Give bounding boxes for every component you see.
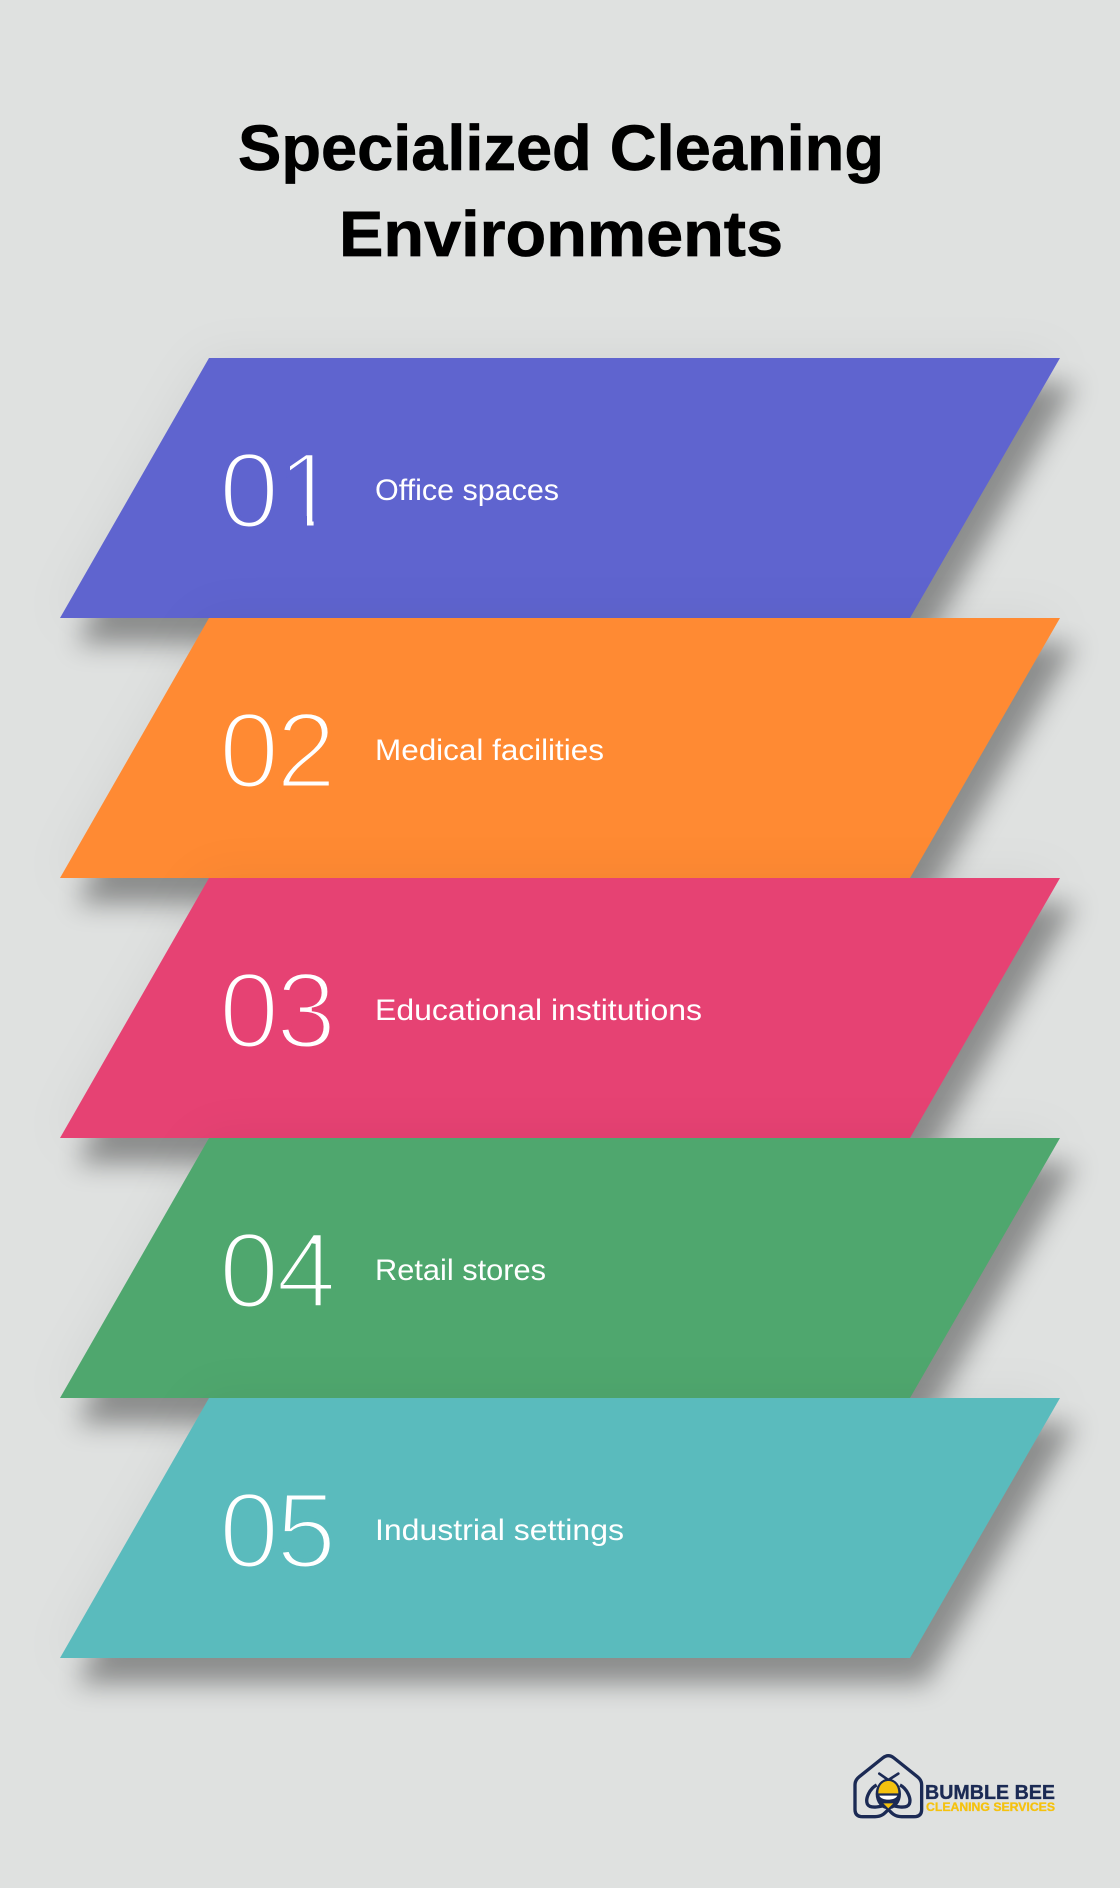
panel: 04 retail stores: Retail stores [375, 1254, 546, 1287]
title: Environments [339, 198, 783, 270]
logo tagline: CLEANING SERVICES [926, 1800, 1055, 1814]
panel: 01 office spaces [60, 358, 1060, 618]
panel: 04 retail stores: 04 [219, 1210, 333, 1330]
panel: 04 retail stores [60, 1138, 1060, 1398]
panel: 05 industrial settings: 05 [219, 1470, 333, 1590]
logo wordmark: BUMBLE BEE [925, 1781, 1055, 1804]
panel: 03 educational institutions: Educational institutions [375, 994, 702, 1027]
panel: 03 educational institutions [60, 878, 1060, 1138]
icon: house with bee [855, 1756, 922, 1817]
panel: 02 medical facilities [60, 618, 1060, 878]
title [238, 112, 884, 270]
panel: 05 industrial settings: Industrial settings [375, 1514, 624, 1547]
panel: 02 medical facilities: Medical facilities [375, 734, 604, 767]
panel: 05 industrial settings [60, 1398, 1060, 1658]
panel: 03 educational institutions: 03 [219, 950, 333, 1070]
logo: bumble bee cleaning services [855, 1756, 1055, 1817]
panel: 01 office spaces: Office spaces [375, 474, 559, 507]
panel: 01 office spaces: 01 [219, 430, 336, 550]
title: Specialized Cleaning [238, 112, 884, 184]
panel: 02 medical facilities: 02 [219, 690, 333, 810]
